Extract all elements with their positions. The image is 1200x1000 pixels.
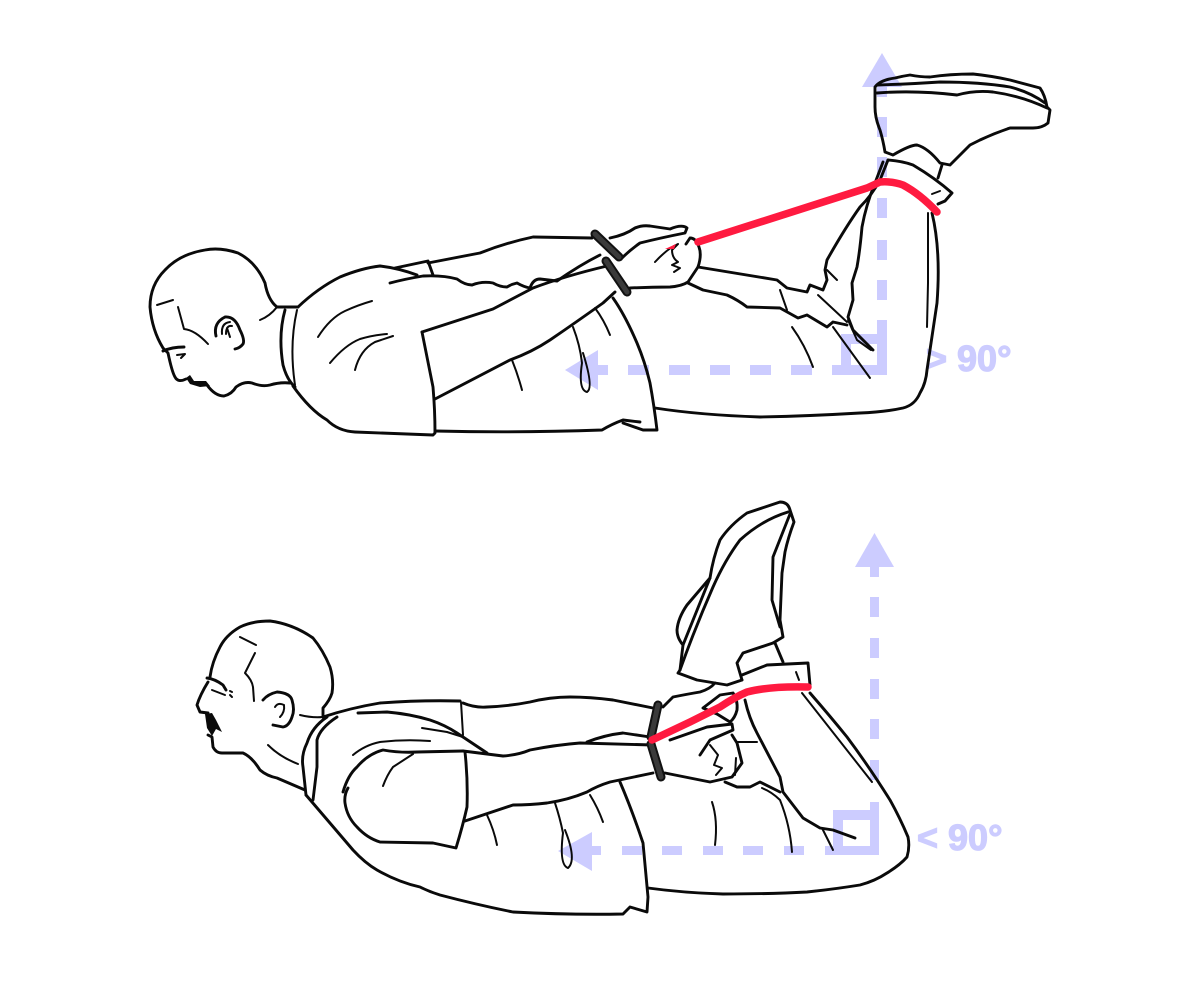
torso and shirt: bottom figure: [302, 693, 909, 914]
torso and shirt: top figure: [281, 261, 657, 435]
trousers: top figure: [655, 160, 952, 417]
head: top figure: [150, 249, 298, 396]
angle label: less than 90 degrees: < 90°: [917, 817, 1002, 858]
wrist cuffs: [651, 705, 661, 777]
head: bottom figure: [197, 621, 333, 790]
angle guide: bottom axes with arrows: [558, 533, 894, 871]
wrist cuffs: [595, 234, 627, 292]
angle label: greater than 90 degrees: > 90°: [926, 338, 1011, 379]
arms: bottom figure: [463, 697, 653, 821]
angle guide: top axes with arrows: [565, 53, 902, 390]
hands and cuffs: bottom figure: [651, 683, 742, 782]
hands and cuffs: top figure: [595, 226, 700, 292]
shoe: bottom figure: [677, 502, 794, 685]
figure: top, knee angle greater than 90 degrees: [150, 53, 1050, 435]
figure: bottom, knee angle less than 90 degrees: [197, 502, 1002, 914]
trousers: bottom figure: [725, 643, 872, 850]
resistance band: bottom figure: [652, 687, 808, 740]
resistance band: top figure: [698, 182, 937, 242]
shoe: top figure: [875, 74, 1050, 178]
red band fragment in hand: [665, 244, 676, 249]
arms: top figure: [390, 237, 615, 399]
